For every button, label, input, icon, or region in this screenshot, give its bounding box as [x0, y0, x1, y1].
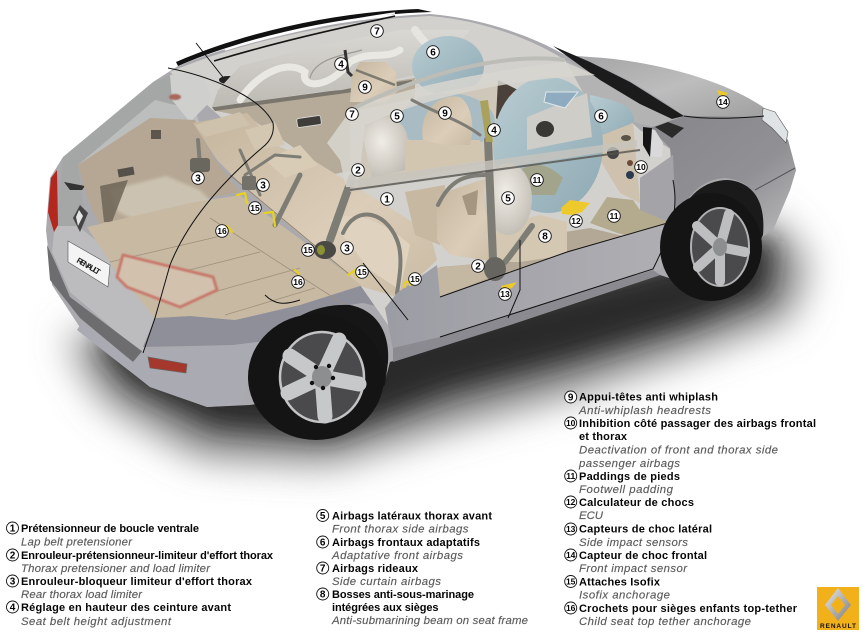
numbered callouts: 5 [505, 194, 511, 205]
numbered callouts: 4 [338, 60, 344, 71]
numbered callouts: 2 [475, 262, 481, 273]
ground shadow [66, 220, 806, 462]
far curtain airbag [212, 30, 470, 107]
legend: items 5 to 8: Airbags rideaux [332, 563, 419, 575]
legend: items 9 to 16: 14 [566, 550, 576, 560]
legend: items 9 to 16: Appui-têtes anti whiplash [579, 392, 718, 404]
badge [73, 205, 88, 232]
renault logo: RENAULT [820, 623, 856, 630]
spare wheel outline [117, 255, 217, 307]
numbered callouts: 12 [571, 216, 581, 226]
near side airbag [484, 163, 532, 235]
far belt height adjuster [345, 50, 352, 76]
numbered callouts: 15 [250, 203, 260, 213]
legend: items 1 to 4: Enrouleur-bloqueur limiteur d'effort thorax [21, 576, 253, 588]
legend: items 1 to 4: 1 [10, 524, 16, 534]
driver side seat and airbag [360, 117, 485, 178]
legend: items 9 to 16: et thorax [579, 431, 628, 443]
headlight [762, 108, 788, 143]
number plate [68, 241, 110, 287]
far headrest [350, 62, 397, 102]
legend: items 5 to 8 [317, 510, 528, 627]
legend: items 9 to 16: Paddings de pieds [579, 471, 680, 483]
numbered callouts [192, 25, 729, 300]
front wheel [660, 180, 763, 301]
legend: items 1 to 4: Thorax pretensioner and load limiter [21, 563, 211, 575]
legend: items 9 to 16: Inhibition côté passager des airbags frontal [579, 418, 816, 430]
numbered callouts: 16 [217, 226, 227, 236]
legend: items 9 to 16: 16 [566, 603, 576, 613]
near roof rail [350, 58, 565, 110]
tail light [48, 170, 58, 232]
near retractor [484, 257, 506, 281]
front floor [440, 222, 672, 297]
numbered callouts: 15 [357, 267, 367, 277]
numbered callouts: 14 [718, 97, 728, 107]
numbered callouts: 1 [384, 195, 390, 206]
rear wheel [248, 305, 388, 440]
legend: items 5 to 8: 8 [320, 590, 326, 600]
trunk wall [78, 118, 240, 226]
numbered callouts: 5 [394, 112, 400, 123]
near front seat headrest [422, 96, 472, 145]
numbered callouts: 10 [636, 162, 646, 172]
cabin middle background [350, 80, 500, 190]
numbered callouts: 13 [500, 289, 510, 299]
near curtain airbag [327, 62, 595, 187]
legend: items 5 to 8: Front thorax side airbags [332, 524, 469, 536]
numbered callouts: 11 [610, 211, 619, 221]
near door panel [385, 218, 685, 350]
legend: items 5 to 8: Adaptative front airbags [331, 550, 463, 562]
legend: items 1 to 4: 2 [10, 550, 16, 562]
legend: items 5 to 8: Anti-submarining beam on seat frame [331, 615, 528, 627]
numbered callouts: 3 [344, 244, 350, 255]
car illustration [46, 9, 796, 440]
hood [583, 57, 764, 117]
numbered callouts: 6 [598, 112, 604, 123]
numbered callouts: 2 [355, 166, 361, 177]
legend: items 1 to 4 [6, 522, 274, 628]
legend: items 9 to 16 [565, 391, 816, 628]
rear glass [57, 75, 195, 226]
numbered callouts: 16 [293, 277, 303, 287]
legend: items 5 to 8: Bosses anti-sous-marinage [332, 589, 474, 601]
legend: items 9 to 16: Attaches Isofix [579, 577, 661, 589]
big front airbag [493, 77, 603, 213]
numbered callouts: 4 [491, 126, 497, 137]
number plate: RENAULT [75, 256, 102, 277]
legend: items 5 to 8: Airbags frontaux adaptatifs [332, 537, 480, 549]
legend: items 5 to 8: intégrées aux sièges [332, 602, 438, 614]
seat cushion [497, 215, 567, 262]
legend: items 9 to 16: 12 [566, 497, 576, 507]
legend: items 9 to 16: 15 [566, 576, 576, 586]
rear belts [198, 140, 400, 293]
rear reflector [148, 357, 187, 373]
front fender [650, 116, 796, 232]
legend: items 5 to 8: Side curtain airbags [332, 576, 441, 588]
legend: items 1 to 4: 4 [10, 602, 16, 614]
far front airbag [412, 36, 484, 96]
ecu sensor yellow [561, 200, 590, 215]
tailgate and rear end [52, 220, 155, 352]
legend: items 9 to 16: Child seat top tether anchorage [579, 616, 751, 628]
numbered callouts: 3 [260, 181, 266, 192]
numbered callouts: 7 [349, 110, 355, 121]
near sill [393, 270, 660, 362]
near side window band [350, 140, 637, 192]
legend: items 9 to 16: ECU [579, 510, 604, 522]
car body [46, 14, 796, 407]
cabin glass [170, 16, 676, 335]
legend: items 1 to 4: 3 [10, 576, 16, 588]
legend: items 5 to 8: 7 [320, 564, 326, 574]
legend: items 9 to 16: Anti-whiplash headrests [578, 405, 711, 417]
legend: items 9 to 16: Capteurs de choc latéral [579, 524, 712, 536]
numbered callouts: 15 [303, 245, 313, 255]
yellow isofix marks [227, 90, 728, 291]
rear floor near [435, 262, 495, 298]
right front airbag [590, 95, 634, 140]
legend: items 9 to 16: 11 [566, 471, 575, 481]
mirror [643, 122, 684, 157]
legend: items 1 to 4: Réglage en hauteur des ceinture avant [21, 602, 231, 614]
rear belt retractors [190, 158, 336, 259]
legend: items 5 to 8: 6 [320, 538, 326, 548]
legend: items 9 to 16: 10 [566, 418, 576, 428]
footwell paddings [520, 165, 670, 240]
door panel [597, 123, 640, 203]
numbered callouts: 9 [442, 109, 448, 120]
lower seats [405, 185, 445, 245]
near belt [412, 100, 532, 262]
far door [212, 78, 415, 175]
numbered callouts: 9 [362, 83, 368, 94]
legend: items 9 to 16: Capteur de choc frontal [579, 550, 707, 562]
legend: items 9 to 16: Front impact sensor [579, 563, 688, 575]
legend: items 1 to 4: Enrouleur-prétensionneur-limiteur d'effort thorax [21, 550, 274, 562]
legend: items 1 to 4: Rear thorax load limiter [21, 589, 143, 601]
rear bumper dark band [47, 245, 143, 362]
legend: items 9 to 16: Calculateur de chocs [579, 497, 694, 509]
numbered callouts: 15 [410, 274, 420, 284]
legend: items 9 to 16: 13 [566, 524, 576, 534]
windscreen grey [565, 60, 684, 128]
numbered callouts: 7 [374, 27, 380, 38]
legend: items 5 to 8: 5 [320, 511, 326, 522]
legend: items 1 to 4: Seat belt height adjustment [21, 616, 172, 628]
windscreen base dark [553, 46, 684, 119]
renault logo [817, 587, 859, 630]
driver airbag [399, 93, 495, 151]
legend: items 9 to 16: Crochets pour sièges enfants top-tether [579, 603, 798, 615]
rear seat bench [193, 112, 437, 297]
legend: items 9 to 16: 9 [568, 392, 574, 404]
front door upper panel [640, 155, 676, 247]
legend: items 9 to 16: Isofix anchorage [579, 590, 670, 602]
aerial [196, 43, 237, 84]
cargo floor [87, 195, 363, 320]
roof rails [176, 9, 432, 66]
legend: items 5 to 8: Airbags latéraux thorax avant [332, 510, 492, 522]
legend: items 9 to 16: Deactivation of front and thorax side [579, 444, 778, 456]
dashboard centre [496, 80, 526, 128]
legend: items 9 to 16: passenger airbags [578, 458, 680, 470]
legend: items 1 to 4: Lap belt pretensioner [21, 536, 133, 548]
numbered callouts: 6 [430, 48, 436, 59]
door and body lines [143, 68, 795, 353]
legend: items 9 to 16: Side impact sensors [579, 537, 688, 549]
numbered callouts: 3 [195, 174, 201, 185]
numbered callouts: 11 [532, 175, 542, 185]
legend: items 9 to 16: Footwell padding [579, 484, 674, 496]
rear quarter panel [143, 285, 397, 347]
legend: items 1 to 4: Prétensionneur de boucle ventrale [21, 523, 199, 535]
rear bumper [77, 322, 273, 407]
numbered callouts: 8 [542, 232, 548, 243]
